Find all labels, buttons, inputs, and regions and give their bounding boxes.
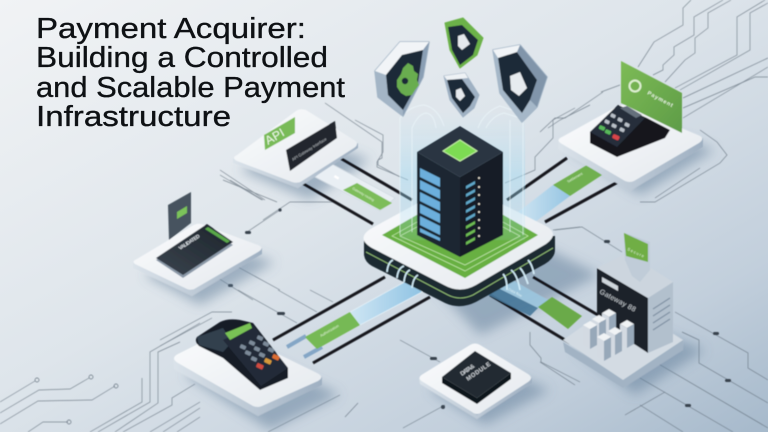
merchant building <box>597 253 673 353</box>
connector: lower-right bus: Data flow <box>508 287 523 298</box>
icon: right shield <box>493 45 547 122</box>
title <box>36 13 345 133</box>
connector: lower-right bus <box>482 273 615 343</box>
connector: upper-left bus <box>302 158 412 224</box>
icon: large left shield <box>375 42 429 116</box>
API card: API <box>262 125 287 148</box>
developer console panel: API Gateway Interface <box>291 136 328 162</box>
panel: chip module platform <box>419 344 532 419</box>
card terminal <box>590 105 670 157</box>
panel: merchant building platform <box>563 233 683 388</box>
connector: lower-left bus <box>273 277 430 363</box>
panel: card terminal platform <box>558 61 703 191</box>
platform cable loops <box>387 260 534 290</box>
connector: upper-right bus: Settlement <box>566 172 583 184</box>
storage blocks <box>583 309 634 361</box>
title: Infrastructure <box>36 101 231 133</box>
chip module <box>442 351 511 404</box>
server lights right <box>466 177 480 245</box>
chip module: MODULE <box>466 362 492 383</box>
panel: API platform <box>233 109 358 188</box>
green shield sign: Secure <box>627 246 646 259</box>
soft platform shadows <box>145 120 715 430</box>
connector: upper-right bus <box>507 158 618 222</box>
server slots left <box>420 168 440 241</box>
chip module: DATA & <box>460 363 477 378</box>
green payment card: Payment <box>646 90 674 109</box>
title: Building a Controlled <box>36 42 328 74</box>
payment card upright <box>168 192 191 240</box>
panel: central platform <box>364 186 555 306</box>
panel: POS terminal platform <box>173 319 322 416</box>
icon: server tower <box>417 126 503 257</box>
panel: mobile platform <box>133 192 262 296</box>
green payment card <box>621 61 682 133</box>
merchant building: Gateway 88 <box>598 289 637 314</box>
connector: lower-left bus: Authorization <box>320 324 340 338</box>
trace nodes <box>35 208 731 424</box>
light beams <box>400 105 525 240</box>
connector: upper-left bus: Gateway routing <box>352 186 375 202</box>
title: Payment Acquirer: <box>36 13 306 45</box>
POS terminal <box>196 319 288 390</box>
title: and Scalable Payment <box>36 72 345 104</box>
green shield sign <box>624 233 650 282</box>
icon: small center shield <box>444 73 479 117</box>
smartphone: VALIDATED <box>178 233 202 252</box>
icon: top green shield <box>445 18 483 68</box>
